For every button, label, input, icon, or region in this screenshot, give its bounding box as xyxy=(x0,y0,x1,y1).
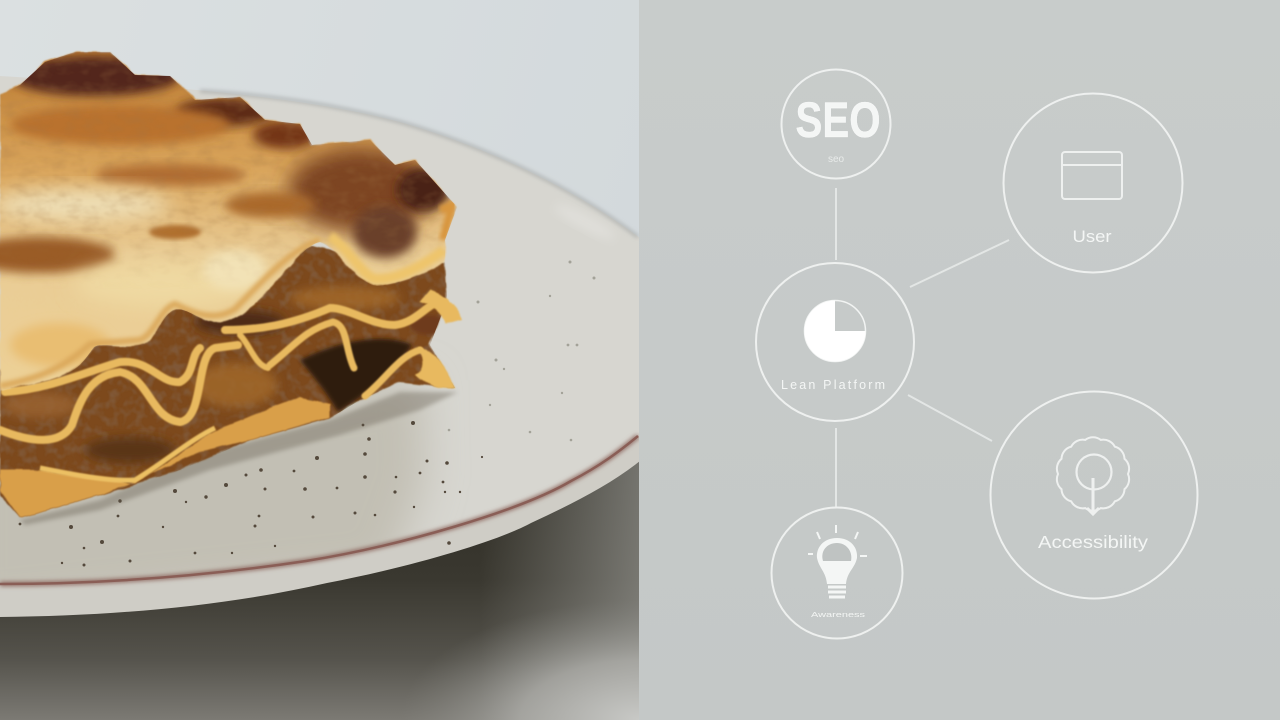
icon: lightbulb xyxy=(808,525,867,597)
contact shadow xyxy=(20,392,458,525)
noodle layers xyxy=(0,302,445,440)
node: User xyxy=(1004,94,1182,272)
photo: lasagna on a speckled plate xyxy=(0,0,640,720)
plate shaded area xyxy=(0,200,618,620)
meat filling xyxy=(0,240,455,517)
plate top edge xyxy=(200,91,638,237)
SEO caption: seo xyxy=(828,154,844,165)
icon: browser window xyxy=(1062,152,1122,199)
plate underside xyxy=(0,430,640,617)
central label: Lean Platform xyxy=(781,378,885,392)
SEO heading: SEO xyxy=(796,92,880,148)
node: lightbulb xyxy=(772,508,902,638)
connector lines xyxy=(836,188,1009,507)
meat texture and dark gaps xyxy=(0,246,455,500)
lightbulb label: Awareness xyxy=(811,610,865,619)
browned crust xyxy=(0,50,460,386)
panel background xyxy=(639,0,1280,720)
lasagna slice xyxy=(0,50,462,525)
top cheese sheet xyxy=(0,52,457,390)
plate speckles xyxy=(19,421,483,566)
User label: User xyxy=(1072,228,1112,246)
plate rim line xyxy=(0,436,638,584)
noodle end: upper right xyxy=(420,290,462,324)
table highlight xyxy=(438,619,639,720)
plate surface xyxy=(0,76,639,529)
node: Accessibility xyxy=(990,392,1198,598)
plate rim core xyxy=(0,436,638,584)
bottom noodle slab xyxy=(0,397,330,517)
faint speckles on bright side xyxy=(448,260,596,441)
Accessibility label: Accessibility xyxy=(1038,532,1148,552)
table shadow xyxy=(0,440,640,720)
node: central pie chart xyxy=(756,263,914,421)
icon: gear with key xyxy=(1057,437,1129,514)
table right glow xyxy=(500,462,639,678)
node: SEO xyxy=(782,70,890,178)
icon: pie chart xyxy=(804,300,866,362)
background wall xyxy=(0,0,639,237)
noodle end: lower right xyxy=(415,346,456,388)
panel: web quality diagram xyxy=(639,0,1280,720)
bottom noodle fold xyxy=(40,428,215,480)
